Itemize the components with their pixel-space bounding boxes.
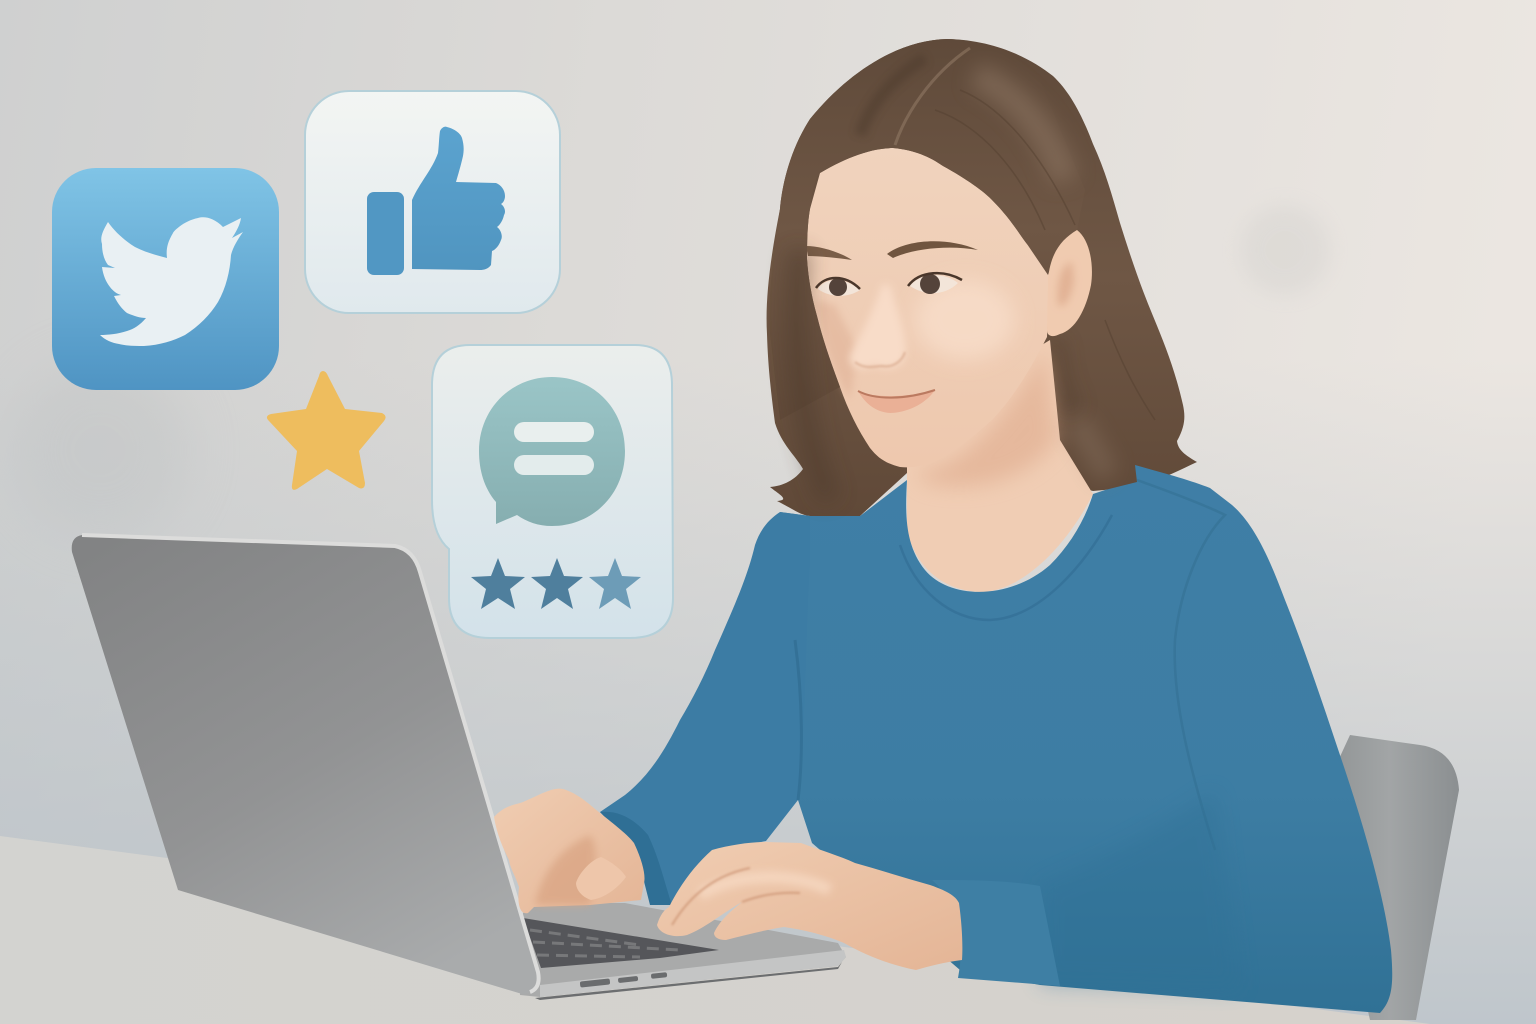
hand on trackpad xyxy=(657,842,962,970)
ear xyxy=(1047,230,1092,336)
hair: back layer xyxy=(767,39,1197,516)
inner ear xyxy=(1058,262,1074,306)
face side shadow xyxy=(815,300,858,400)
collar xyxy=(900,515,1112,620)
brows xyxy=(887,241,978,258)
right cuff xyxy=(932,880,1060,986)
shoulder seam xyxy=(1137,480,1225,850)
hair: front layer and part xyxy=(769,39,1085,420)
sleeve cuff left xyxy=(600,812,672,905)
finger creases xyxy=(672,868,800,925)
laptop base xyxy=(520,903,846,997)
sleeve fold xyxy=(795,640,801,800)
icon: twitter bird card xyxy=(52,168,279,390)
chair xyxy=(1320,735,1459,1020)
thumb xyxy=(576,857,626,900)
table xyxy=(0,836,1430,1024)
knuckle highlight xyxy=(700,877,830,895)
neck shadow xyxy=(915,350,1056,487)
lid rim xyxy=(82,535,539,992)
neck xyxy=(907,340,1093,592)
laptop xyxy=(72,535,846,1000)
icon: gold star xyxy=(267,371,386,490)
hair shadow behind ear xyxy=(1055,340,1075,410)
cheek glow xyxy=(915,280,1015,360)
sweater body xyxy=(780,465,1392,1013)
person xyxy=(600,39,1392,1013)
nose xyxy=(850,285,906,368)
speech bubble xyxy=(479,377,625,526)
icon: thumbs up card xyxy=(305,91,560,313)
mouth xyxy=(858,390,935,413)
hair highlights xyxy=(796,48,1155,500)
laptop lid xyxy=(72,535,539,994)
ports xyxy=(580,972,667,988)
body shading xyxy=(1040,790,1240,990)
eyes xyxy=(816,273,962,296)
icon: chat and rating card xyxy=(432,345,673,638)
rating stars xyxy=(471,558,641,609)
sweater left sleeve xyxy=(600,512,810,905)
keyboard xyxy=(523,918,719,968)
palm shadow xyxy=(535,835,596,905)
face xyxy=(807,148,1050,467)
hand on laptop keys xyxy=(494,789,645,913)
